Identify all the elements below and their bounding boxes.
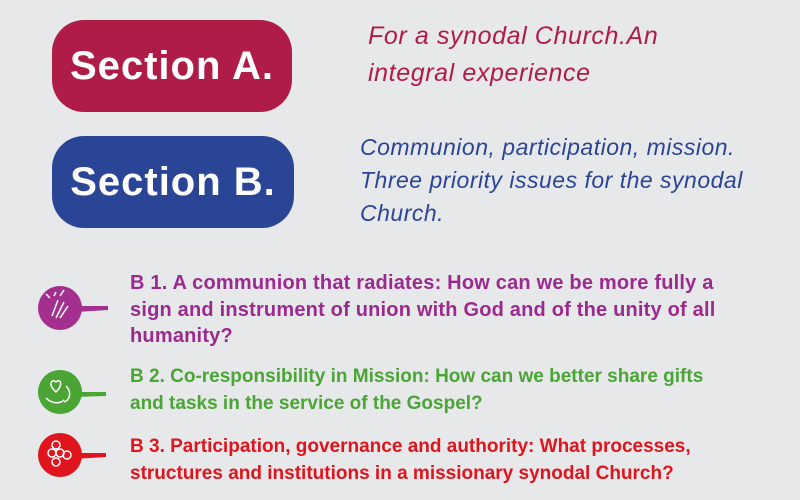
text: section B subtitle: Three priority issues for the synodal xyxy=(360,167,743,193)
text: B2: B 2. Co-responsibility in Mission: How can we better share gifts xyxy=(130,366,703,387)
text: B3 xyxy=(130,436,691,484)
icon: B3 circles xyxy=(38,433,106,477)
text: B2: and tasks in the service of the Gospel? xyxy=(130,392,483,414)
text: B1: sign and instrument of union with God and of the unity of all xyxy=(130,298,716,320)
pill: Section A: Section A. xyxy=(70,44,274,88)
pill: Section B: Section B. xyxy=(70,160,276,204)
text: section A subtitle: For a synodal Church.An xyxy=(368,22,658,50)
text: B2 xyxy=(130,366,703,414)
text: B1 xyxy=(130,272,716,347)
text: section B subtitle xyxy=(360,134,743,226)
text: section A subtitle xyxy=(368,22,658,87)
pill: Section B xyxy=(52,136,294,228)
text: B3: structures and institutions in a missionary synodal Church? xyxy=(130,462,674,484)
text: section B subtitle: Church. xyxy=(360,200,444,226)
text: B3: B 3. Participation, governance and authority: What processes, xyxy=(130,436,691,457)
text: B1: B 1. A communion that radiates: How can we be more fully a xyxy=(130,272,714,294)
icon: B2 heart hands xyxy=(38,370,106,414)
icon: B1 hands xyxy=(38,286,108,330)
text: section B subtitle: Communion, participation, mission. xyxy=(360,134,735,160)
text: B1: humanity? xyxy=(130,325,233,347)
pill: Section A xyxy=(52,20,292,112)
text: section A subtitle: integral experience xyxy=(368,59,591,87)
